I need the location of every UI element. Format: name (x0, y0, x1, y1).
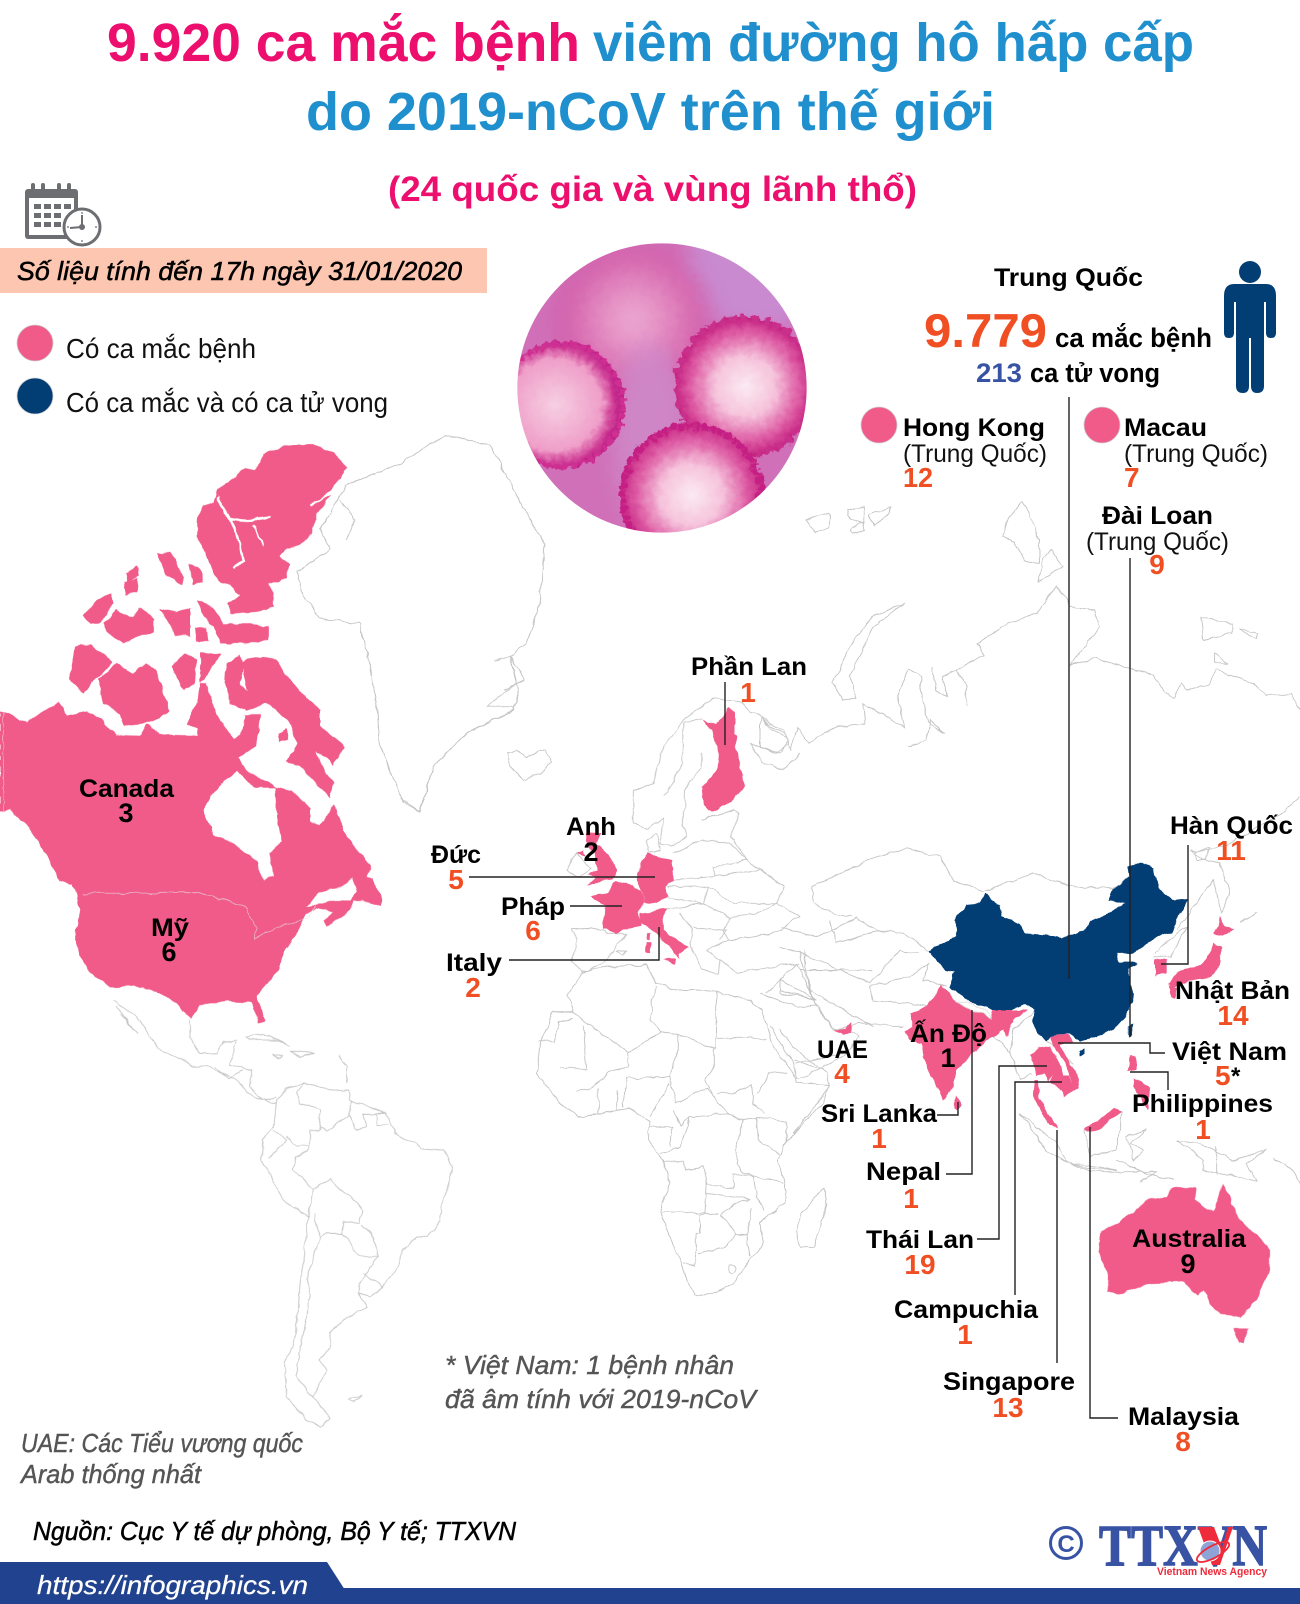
label: Macau: Macau (1124, 414, 1207, 442)
note: Vietnam (445, 1350, 759, 1414)
label: Malaysia: Malaysia (1128, 1403, 1240, 1431)
logo: TTXVN (1050, 1513, 1268, 1578)
label: Canada (79, 775, 175, 828)
footer bar with URL (0, 1562, 1300, 1604)
photo: coronavirus micrograph (517, 243, 807, 533)
label: Canada: Canada (79, 775, 175, 803)
map: Greenland outline (297, 435, 545, 812)
icon: person (1224, 261, 1276, 393)
note: Vietnam: * Việt Nam: 1 bệnh nhân (445, 1350, 734, 1380)
label: Italy (446, 949, 502, 1003)
note: Vietnam: đã âm tính với 2019-nCoV (445, 1384, 759, 1414)
label: Vietnam: Việt Nam (1172, 1038, 1287, 1066)
title: 9.920 ca mắc bệnh (107, 13, 580, 73)
label: Germany (431, 841, 481, 895)
legend: Có ca mắc và có ca tử vong (66, 387, 388, 418)
label: South Korea: 11 (1216, 835, 1246, 866)
label: UAE: UAE (817, 1036, 868, 1064)
label: Thailand (866, 1226, 974, 1280)
label: France (501, 893, 565, 946)
label: Australia: 9 (1180, 1249, 1196, 1279)
label: Taiwan: 9 (1149, 549, 1165, 580)
label: Hong Kong: 12 (903, 462, 933, 493)
note: UAE abbreviation (19, 1428, 303, 1489)
label: South Korea: Hàn Quốc (1170, 812, 1293, 840)
label: Italy: 2 (465, 972, 481, 1003)
map: Asian countries highlighted (833, 917, 1235, 1132)
callout: China totals: 213 (976, 358, 1022, 388)
label: Germany: Đức (431, 841, 481, 869)
leader lines (469, 397, 1188, 1418)
callout: China totals: ca mắc bệnh (1055, 322, 1212, 353)
label: Australia: Australia (1132, 1225, 1247, 1253)
date bar (0, 248, 487, 293)
subtitle: (24 quốc gia và vùng lãnh thổ) (388, 170, 917, 209)
logo: TTXVN: C (1057, 1531, 1075, 1558)
map: Americas outlines (113, 1000, 453, 1427)
label: France: 6 (525, 915, 541, 946)
label: Hong Kong (861, 407, 1047, 493)
label: Macau: 7 (1124, 462, 1140, 493)
label: Philippines (1132, 1090, 1273, 1145)
title: do 2019-nCoV trên thế giới (306, 82, 995, 142)
label: Singapore (943, 1368, 1075, 1423)
label: Italy: Italy (446, 949, 502, 977)
label: Sri Lanka: Sri Lanka (821, 1100, 938, 1128)
legend: Có ca mắc bệnh (66, 333, 256, 364)
map: China highlighted (928, 863, 1188, 1056)
label: UAE (817, 1036, 868, 1089)
world map (0, 435, 1300, 1427)
map: Australia highlighted (1098, 1183, 1270, 1343)
label: UAE: 4 (834, 1058, 850, 1089)
label: Japan: Nhật Bản (1175, 977, 1290, 1005)
label: Germany: 5 (448, 864, 464, 895)
callout: China totals: ca tử vong (1030, 358, 1160, 388)
map: Canada and USA highlighted (0, 444, 383, 1023)
label: Finland: Phần Lan (691, 653, 807, 681)
label: Macau: (Trung Quốc) (1124, 440, 1268, 468)
map: Arctic Russia outlines (760, 502, 1300, 753)
label: Cambodia: Campuchia (894, 1296, 1039, 1324)
label: Vietnam: 5 (1215, 1060, 1231, 1091)
label: Philippines: 1 (1195, 1114, 1211, 1145)
label: Japan (1175, 977, 1290, 1031)
label: Singapore: Singapore (943, 1368, 1075, 1396)
note: UAE abbreviation: UAE: Các Tiểu vương quốc (21, 1428, 303, 1458)
icon: calendar and clock (25, 183, 100, 245)
label: Nepal: 1 (903, 1183, 919, 1214)
label: UK (566, 813, 616, 867)
label: Sri Lanka (821, 1100, 938, 1154)
label: Hong Kong: Hong Kong (903, 414, 1045, 442)
title (107, 13, 1194, 142)
callout: China totals: Trung Quốc (994, 264, 1143, 292)
label: Macau (1084, 407, 1268, 493)
map: Africa and Arabia outlines (537, 950, 873, 1295)
label: South Korea (1170, 812, 1293, 866)
label: Hong Kong: (Trung Quốc) (903, 440, 1047, 468)
legend (17, 325, 388, 418)
label: Malaysia (1128, 1403, 1240, 1457)
label: Taiwan: (Trung Quốc) (1086, 528, 1229, 556)
label: Singapore: 13 (992, 1392, 1024, 1423)
label: Nepal: Nepal (866, 1158, 941, 1186)
label: Cambodia (894, 1296, 1039, 1350)
label: UK: 2 (583, 837, 599, 867)
label: Taiwan: Đài Loan (1102, 502, 1213, 530)
label: UK: Anh (566, 813, 616, 841)
label: India: Ấn Độ (910, 1019, 987, 1048)
label: Japan: 14 (1217, 1000, 1249, 1031)
country labels (79, 653, 1293, 1457)
logo: TTXVN: Vietnam News Agency (1157, 1566, 1268, 1578)
label: Malaysia: 8 (1175, 1426, 1191, 1457)
callout: China totals: 9.779 (924, 304, 1047, 357)
callout: China totals (924, 264, 1212, 388)
map: Europe outlines (400, 657, 800, 973)
label: Taiwan (1086, 502, 1229, 580)
label: Nepal (866, 1158, 941, 1214)
label: Thailand: Thái Lan (866, 1226, 974, 1254)
label: Sri Lanka: 1 (871, 1123, 887, 1154)
note: UAE abbreviation: Arab thống nhất (19, 1459, 203, 1489)
map: European countries highlighted (577, 708, 745, 966)
label: Cambodia: 1 (957, 1319, 973, 1350)
source: Nguồn: Cục Y tế dự phòng, Bộ Y tế; TTXVN (33, 1516, 516, 1546)
label: Canada: 3 (118, 798, 134, 828)
label: Philippines: Philippines (1132, 1090, 1273, 1118)
map: New Guinea and Indonesia outlines (1060, 1140, 1300, 1183)
label: Australia (1132, 1225, 1247, 1279)
label: Finland (691, 653, 807, 708)
label: India (910, 1019, 987, 1073)
label: USA: 6 (161, 937, 177, 967)
title: viêm đường hô hấp cấp (593, 13, 1194, 73)
label: Vietnam (1172, 1038, 1287, 1091)
label: India: 1 (940, 1043, 956, 1073)
label: France: Pháp (501, 893, 565, 921)
label: USA: Mỹ (151, 914, 189, 942)
label: Vietnam: * (1231, 1063, 1241, 1090)
logo: TTXVN: TTXVN (1099, 1513, 1267, 1578)
label: USA (151, 914, 189, 967)
label: Finland: 1 (740, 677, 756, 708)
date bar: Số liệu tính đến 17h ngày 31/01/2020 (17, 256, 463, 286)
label: Thailand: 19 (904, 1249, 936, 1280)
footer bar with URL: https://infographics.vn (37, 1570, 308, 1600)
map: Asia outlines (780, 797, 1300, 1180)
